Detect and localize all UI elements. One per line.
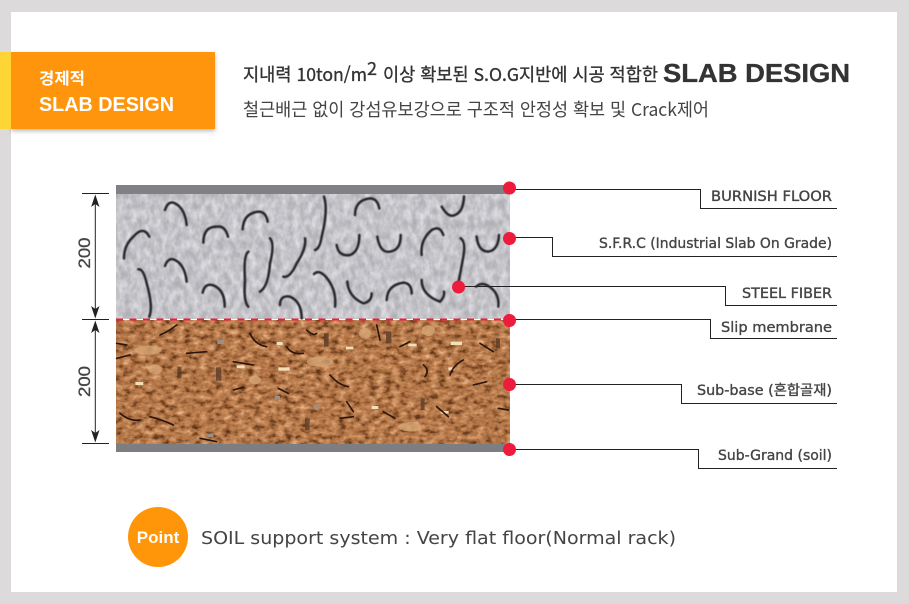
callout: Slip membrane: Slip membrane <box>721 320 832 336</box>
layer: sub-base soil <box>116 320 510 444</box>
steel fibers <box>124 197 499 318</box>
callout: Sub-Grand <box>503 443 837 468</box>
point badge <box>128 507 188 567</box>
callout: BURNISH FLOOR: BURNISH FLOOR <box>711 189 832 205</box>
callout: Sub-Grand: Sub-Grand (soil) <box>718 448 832 464</box>
title: main heading line: 2 <box>367 55 377 81</box>
dimension: 200 lower <box>75 320 109 444</box>
title: main heading line: 지내력 10ton/m <box>243 61 367 87</box>
layer: burnish floor <box>116 185 510 194</box>
heading badge: 경제적 SLAB DESIGN: SLAB DESIGN <box>39 94 174 116</box>
dimension: 200 upper <box>75 194 109 320</box>
callout: Sub-base: Sub-base (혼합골재) <box>697 383 832 399</box>
callout: Sub-base <box>503 378 837 404</box>
callout: S.F.R.C: S.F.R.C (Industrial Slab On Grade) <box>599 236 832 252</box>
heading badge: 경제적 SLAB DESIGN: 경제적 <box>39 65 85 89</box>
title: main heading line: 이상 확보된 S.O.G지반에 시공 적합한 <box>383 61 658 87</box>
subtitle: 철근배근 없이 강섬유보강으로 구조적 안정성 확보 및 Crack제어 <box>243 96 709 122</box>
dimension: 200 upper: 200 <box>75 237 94 269</box>
point badge: Point <box>137 528 180 547</box>
layer: concrete S.F.R.C <box>116 194 510 319</box>
title: main heading line: SLAB DESIGN <box>663 58 850 88</box>
heading badge: 경제적 SLAB DESIGN <box>0 52 215 129</box>
title: main heading line <box>243 55 850 88</box>
point text: SOIL support system : Very flat floor(Normal rack) <box>201 528 676 549</box>
layer: sub-grand <box>116 444 510 452</box>
callout: Slip membrane <box>503 314 837 338</box>
callout: S.F.R.C <box>503 232 837 256</box>
callout: STEEL FIBER: STEEL FIBER <box>742 286 832 302</box>
layer: slip membrane dashed line <box>116 318 510 320</box>
callout: STEEL FIBER <box>452 280 837 306</box>
callout: BURNISH FLOOR <box>503 182 837 208</box>
cross-section diagram <box>116 185 510 452</box>
dimension: 200 lower: 200 <box>75 366 94 397</box>
